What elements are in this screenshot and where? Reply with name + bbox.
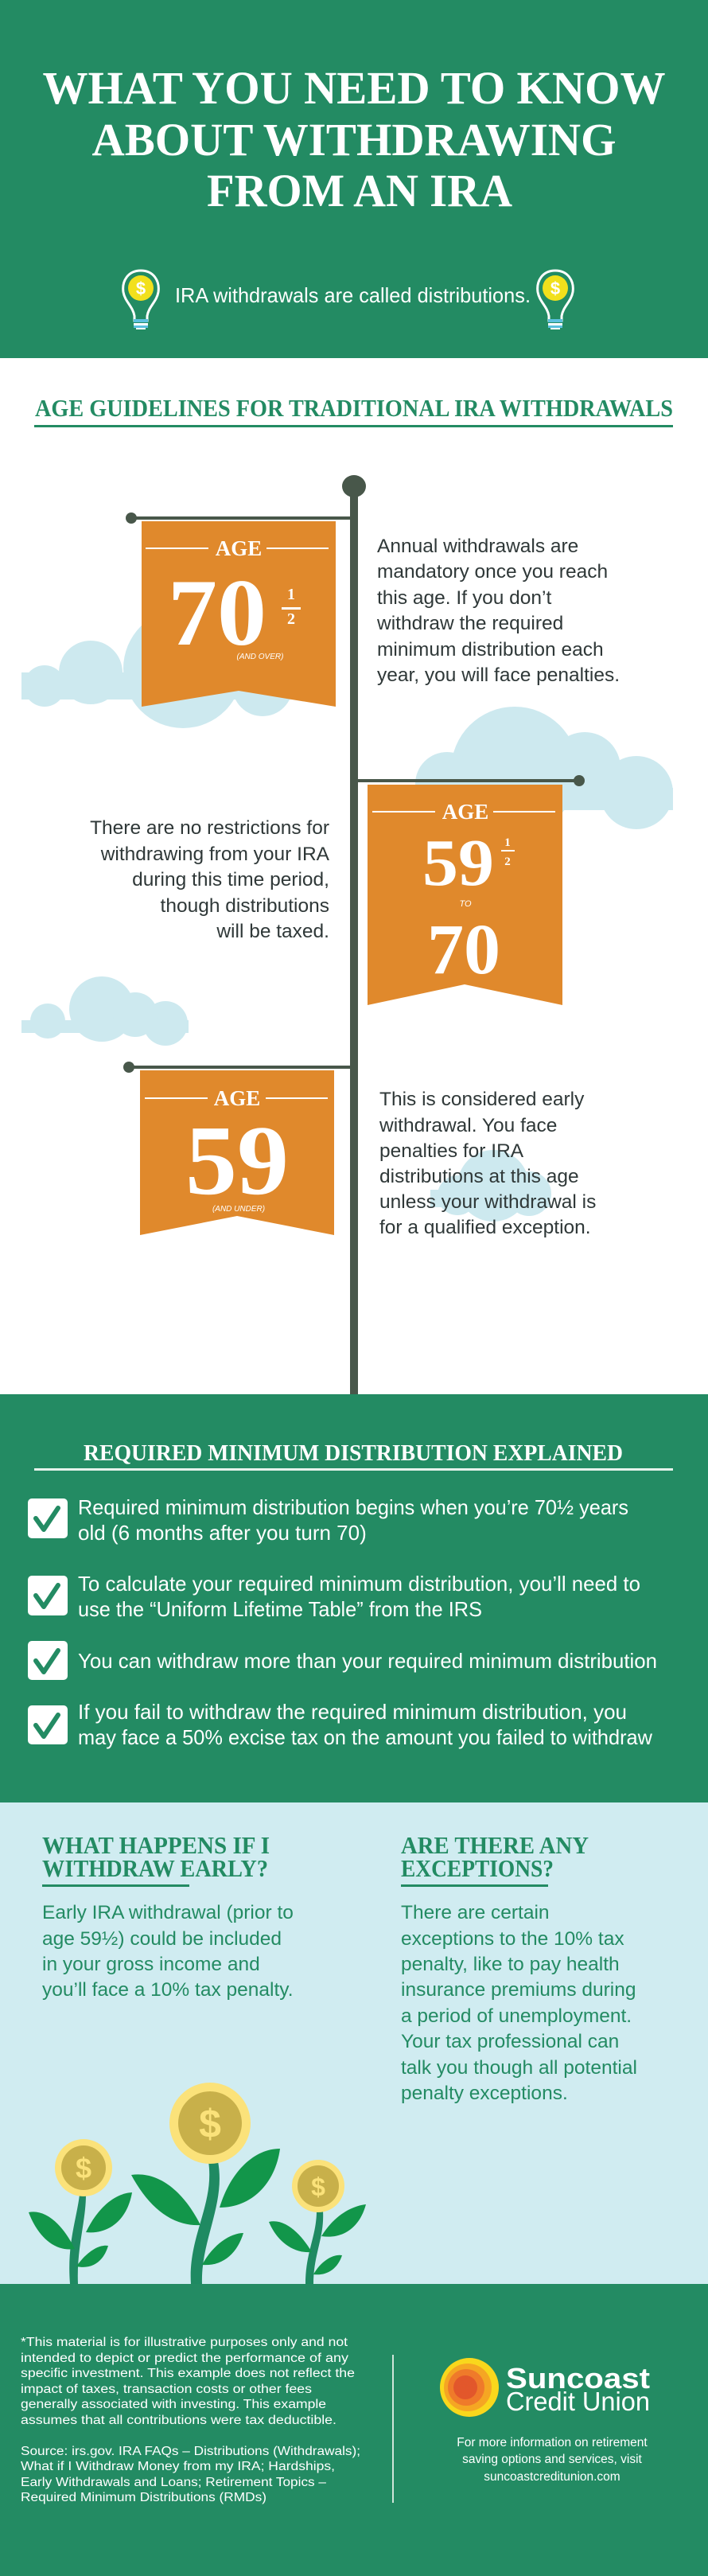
checklist: Required minimum distribution begins when you’re 70½ years [78,1495,628,1519]
text: age 59 1/2 to 70: during this time period, [132,869,329,890]
title: ABOUT WITHDRAWING [92,114,616,166]
disclaimer text: *This material is for illustrative purposes only and not [21,2336,348,2349]
checklist [28,1495,657,1749]
flag: age 59 1/2 to 70: 1 [504,836,511,849]
text: exceptions: a period of unemployment. [401,2005,632,2027]
flag: age 70 1/2 [142,521,336,707]
checklist: If you fail to withdraw the required minimum distribution, you [78,1700,627,1724]
text: age 59 1/2 to 70: will be taxed. [216,921,329,942]
flag: age 59 1/2 to 70: 70 [427,910,500,989]
heading: RMD explained: REQUIRED MINIMUM DISTRIBUTION EXPLAINED [84,1440,623,1466]
flag: age 70 1/2: (AND OVER) [237,653,283,661]
flag: age 70 1/2: 2 [287,610,295,628]
icon: light bulb right: $ [550,279,560,298]
text: early withdrawal: in your gross income and [42,1954,260,1975]
disclaimer text: impact of taxes, transaction costs or other fees [21,2383,312,2396]
heading: are there any exceptions: ARE THERE ANY [401,1831,589,1859]
disclaimer text: What if I Withdraw Money from my IRA; Hardships, [21,2460,335,2473]
text: age 70 1/2: this age. If you don’t [377,587,551,609]
text: early withdrawal: age 59½) could be included [42,1928,282,1950]
heading: what happens if I withdraw early: WITHDRAW EARLY? [42,1854,268,1882]
text: early withdrawal [42,1902,294,2001]
text: age 59 [379,1089,596,1238]
flag: age 59: (AND UNDER) [212,1205,265,1214]
contact text [457,2436,648,2484]
flag: age 59 1/2 to 70: 2 [504,855,511,868]
panel: required minimum distribution [0,1394,708,1802]
icon: light bulb right [538,271,573,329]
text: exceptions: penalty exceptions. [401,2083,568,2104]
text: age 70 1/2: year, you will face penalties. [377,664,620,686]
text: age 59: penalties for IRA [379,1140,524,1162]
disclaimer text: assumes that all contributions were tax deductible. [21,2414,336,2427]
text: age 59 1/2 to 70: There are no restrictions for [90,817,329,839]
text: early withdrawal: Early IRA withdrawal (prior to [42,1902,294,1923]
text: exceptions [401,1902,637,2104]
text: age 70 1/2 [376,536,620,686]
text: age 59: withdrawal. You face [379,1115,557,1136]
disclaimer text: Source: irs.gov. IRA FAQs – Distributions (Withdrawals); [21,2445,360,2458]
flag: age 59 1/2 to 70: AGE [442,800,488,824]
flag: age 59 1/2 to 70 [368,785,562,1005]
contact text: For more information on retirement [457,2436,648,2449]
contact text: suncoastcreditunion.com [484,2470,620,2484]
text: exceptions: exceptions to the 10% tax [401,1928,624,1950]
checklist: use the “Uniform Lifetime Table” from the IRS [78,1597,482,1621]
text: age 70 1/2: minimum distribution each [377,639,604,661]
bulb caption: IRA withdrawals are called distributions. [175,283,531,307]
title: FROM AN IRA [207,165,512,216]
logo: suncoast credit union: Credit Union [506,2387,650,2416]
text: early withdrawal: you’ll face a 10% tax penalty. [42,1979,294,2001]
disclaimer text: generally associated with investing. This example [21,2398,326,2411]
clouds [21,609,673,1222]
flag: age 59 1/2 to 70: 59 [422,826,494,900]
panel: early withdrawal and exceptions [0,1802,708,2284]
checklist: You can withdraw more than your required minimum distribution [78,1649,657,1673]
icon: light bulb left [123,271,158,329]
disclaimer text [21,2336,360,2504]
footer panel [0,2284,708,2576]
text: age 59 1/2 to 70: withdrawing from your IRA [100,844,330,865]
text: exceptions: talk you though all potential [401,2057,637,2079]
text: age 70 1/2: Annual withdrawals are [377,536,578,557]
illustration: money plants: $ [199,2102,221,2146]
disclaimer text: Early Withdrawals and Loans; Retirement Topics – [21,2476,326,2489]
checklist: To calculate your required minimum distribution, you’ll need to [78,1572,640,1596]
flag: age 59 1/2 to 70: TO [459,899,472,909]
checklist: old (6 months after you turn 70) [78,1521,367,1545]
text: age 59 1/2 to 70 [90,817,330,942]
text: age 70 1/2: mandatory once you reach [377,561,608,583]
illustration: money plants [29,2083,366,2284]
disclaimer text: Required Minimum Distributions (RMDs) [21,2491,266,2504]
heading: are there any exceptions: EXCEPTIONS? [401,1854,554,1882]
text: age 59: unless your withdrawal is [379,1191,596,1213]
flag: age 59: AGE [214,1086,260,1110]
logo: suncoast credit union: Suncoast [506,2362,650,2395]
contact text: saving options and services, visit [462,2453,643,2466]
heading: what happens if I withdraw early [42,1831,270,1887]
disclaimer text: intended to depict or predict the performance of any [21,2352,348,2365]
logo: suncoast credit union [440,2358,650,2417]
checklist: may face a 50% excise tax on the amount you failed to withdraw [78,1725,652,1749]
text: exceptions: There are certain [401,1902,550,1923]
icon: light bulb left: $ [136,279,146,298]
flag: age 70 1/2: 1 [287,586,295,603]
disclaimer text: specific investment. This example does not reflect the [21,2367,355,2380]
text: age 59: This is considered early [379,1089,585,1110]
text: age 59: distributions at this age [379,1166,579,1187]
text: age 59: for a qualified exception. [379,1217,591,1238]
text: exceptions: Your tax professional can [401,2031,619,2052]
text: exceptions: insurance premiums during [401,1979,636,2001]
title: WHAT YOU NEED TO KNOW [43,62,665,114]
heading: are there any exceptions [401,1831,589,1887]
heading: what happens if I withdraw early: WHAT HAPPENS IF I [42,1831,270,1859]
flag: age 70 1/2: AGE [216,536,262,560]
flagpole [123,475,585,1397]
title [43,62,665,216]
illustration: money plants: $ [76,2152,91,2184]
flag: age 59 [140,1070,334,1235]
text: age 70 1/2: withdraw the required [376,613,563,634]
header panel [0,0,708,358]
illustration: money plants: $ [311,2173,325,2201]
text: exceptions: penalty, like to pay health [401,1954,620,1975]
text: age 59 1/2 to 70: though distributions [161,895,329,917]
flag: age 59: 59 [185,1106,289,1216]
flag: age 70 1/2: 70 [168,559,266,665]
